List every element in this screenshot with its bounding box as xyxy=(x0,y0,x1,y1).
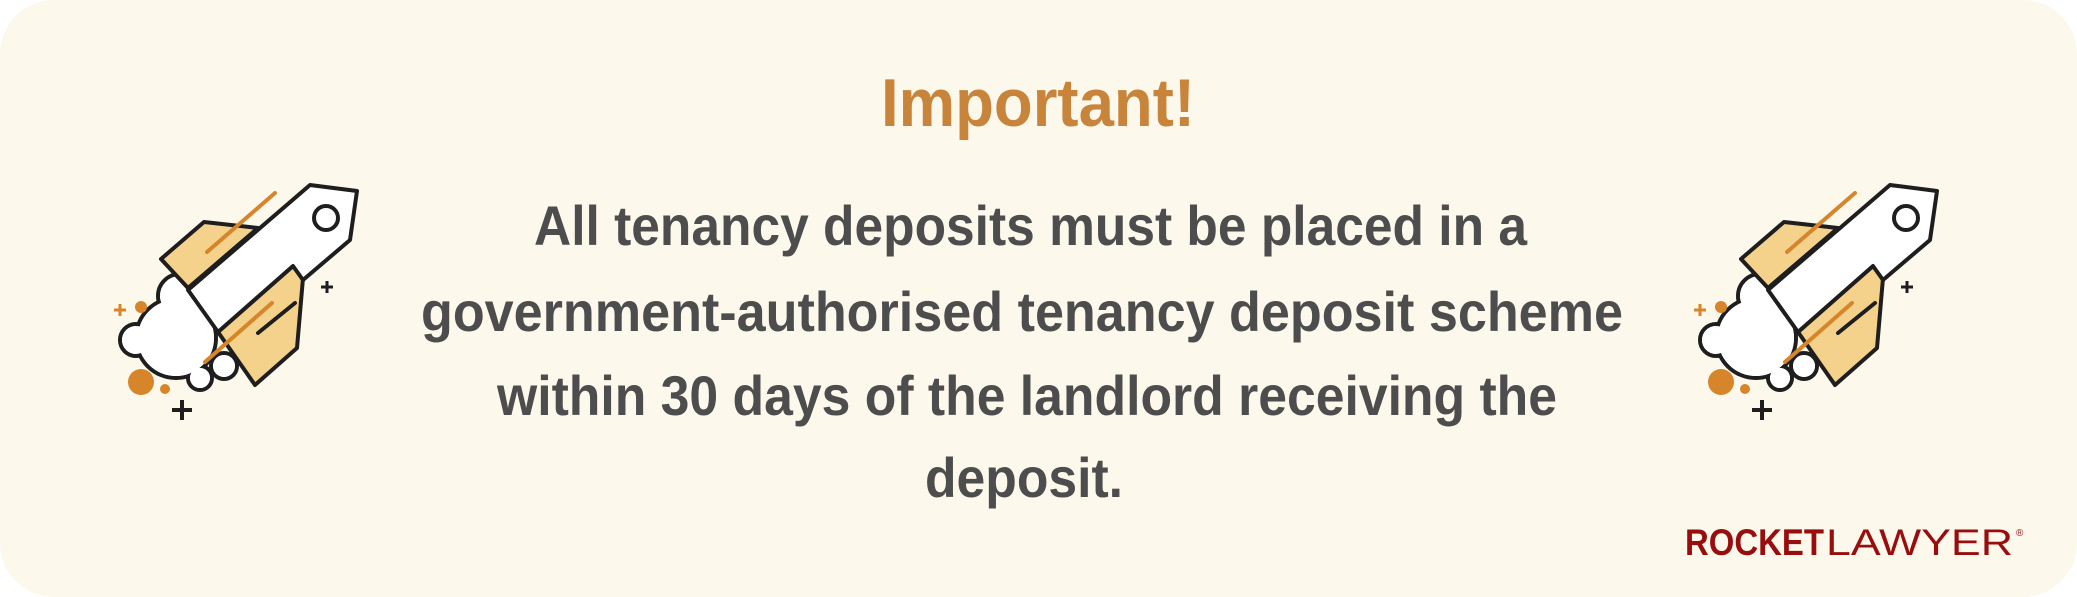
icon: right rocket xyxy=(1694,185,1937,420)
body text: deposit. xyxy=(925,446,1123,509)
body text: government-authorised tenancy deposit scheme xyxy=(421,280,1623,343)
logo: ® xyxy=(2016,528,2024,539)
icon: left rocket xyxy=(114,185,357,420)
body text: All tenancy deposits must be placed in a xyxy=(534,194,1528,257)
body text xyxy=(421,194,1623,509)
body text: within 30 days of the landlord receiving the xyxy=(496,364,1557,427)
logo xyxy=(1685,522,2024,563)
title: Important! xyxy=(881,65,1195,141)
logo: ROCKET xyxy=(1685,522,1824,563)
logo: LAWYER xyxy=(1826,522,2013,563)
